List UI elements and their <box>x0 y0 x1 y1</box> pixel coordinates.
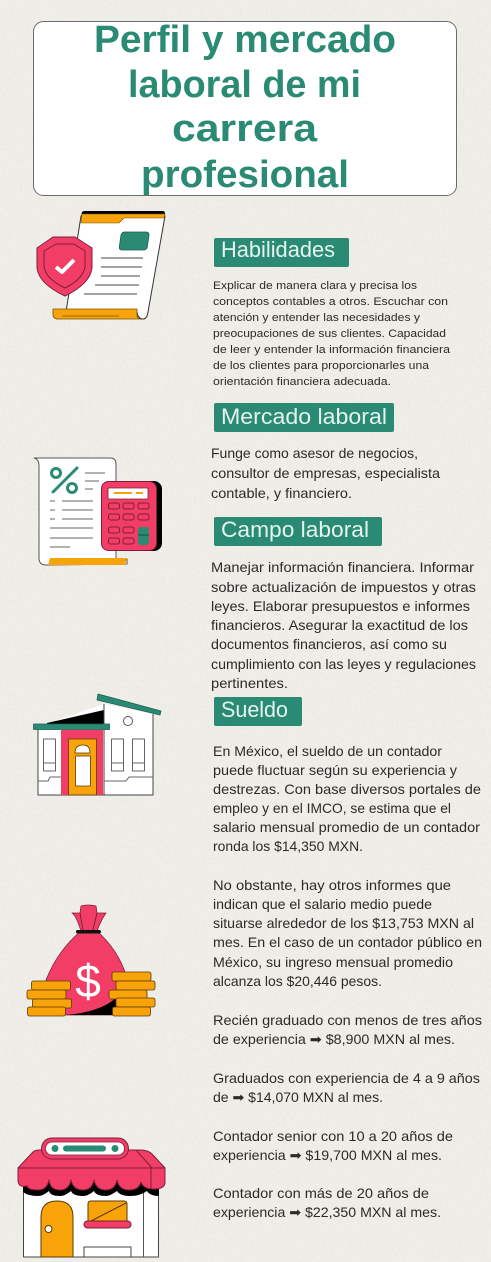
text: contador más de 20 años: Contador con más de 20 años de <box>213 1186 429 1201</box>
text: contador senior: experiencia ➡ $19,700 MXN al mes. <box>213 1148 442 1163</box>
text: contador senior: Contador senior con 10 a 20 años de <box>213 1129 453 1144</box>
title: Perfil y mercado <box>94 19 396 61</box>
heading: Habilidades: Habilidades <box>221 237 335 262</box>
text: contador senior <box>213 1129 453 1163</box>
icon: money bag and coins <box>27 905 155 1016</box>
title: profesional <box>141 154 349 196</box>
icon: money bag and coins: $ <box>75 955 101 1007</box>
text: mercado laboral: consultor de empresas, especialista <box>211 466 440 481</box>
text: recién graduado: Recién graduado con menos de tres años <box>213 1013 482 1028</box>
text: sueldo en México: destrezas. Con base diversos portales de <box>213 782 481 797</box>
text: habilidades: conceptos contables a otros. Escuchar con <box>213 296 448 308</box>
text: mercado laboral: contable, y financiero. <box>211 486 352 501</box>
text: habilidades: atención y entender las necesidades y <box>213 312 421 324</box>
text: recién graduado: de experiencia ➡ $8,900 MXN al mes. <box>213 1032 455 1047</box>
text: campo laboral <box>211 560 476 691</box>
text: campo laboral: sobre actualización de impuestos y otras <box>211 580 476 595</box>
heading: Sueldo <box>214 697 302 726</box>
text: contador más de 20 años <box>213 1186 441 1220</box>
text: campo laboral: Manejar información financiera. Informar <box>211 560 474 575</box>
text: otros informes: México, su ingreso mensual promedio <box>213 955 453 970</box>
text: otros informes: situarse alrededor de los $13,753 MXN al <box>213 916 474 931</box>
title: carrera <box>172 108 318 150</box>
text: sueldo en México: salario mensual promedio de un contador <box>213 820 481 835</box>
title: laboral de mi <box>128 64 361 106</box>
text: habilidades: de leer y entender la información financiera <box>213 344 450 356</box>
text: habilidades: preocupaciones de sus clientes. Capacidad <box>213 328 446 340</box>
text: habilidades: orientación financiera adecuada. <box>213 376 391 388</box>
text: campo laboral: cumplimiento con las leyes y regulaciones <box>211 657 476 672</box>
text: habilidades: de los clientes para proporcionarles una <box>213 360 429 372</box>
text: sueldo en México: ronda los $14,350 MXN. <box>213 839 363 854</box>
icon: document with shield <box>37 211 165 319</box>
text: graduados 4 a 9 años: Graduados con experiencia de 4 a 9 años <box>213 1071 480 1086</box>
heading: Campo laboral: Campo laboral <box>221 517 369 542</box>
title <box>34 19 456 196</box>
text: otros informes: indican que el salario medio puede <box>213 897 432 912</box>
icon: shop <box>18 1138 165 1257</box>
text: campo laboral: documentos financieros, así como su <box>211 637 447 652</box>
text: campo laboral: leyes. Elaborar presupuestos e informes <box>211 599 470 614</box>
text: otros informes: No obstante, hay otros informes que <box>213 878 451 893</box>
text: contador más de 20 años: experiencia ➡ $22,350 MXN al mes. <box>213 1205 441 1220</box>
text: graduados 4 a 9 años: de ➡ $14,070 MXN al mes. <box>213 1090 383 1105</box>
text: mercado laboral: Funge como asesor de negocios, <box>211 446 418 461</box>
text: habilidades <box>213 280 450 388</box>
heading: Sueldo: Sueldo <box>221 697 288 722</box>
text: campo laboral: financieros. Asegurar la exactitud de los <box>211 618 468 633</box>
text: mercado laboral <box>211 446 440 501</box>
text: otros informes: mes. En el caso de un contador público en <box>213 935 482 950</box>
heading: Mercado laboral: Mercado laboral <box>221 404 387 429</box>
text: otros informes <box>213 878 482 989</box>
text: sueldo en México: puede fluctuar según su experiencia y <box>213 763 457 778</box>
icon: receipt and calculator <box>34 458 162 565</box>
text: sueldo en México: En México, el sueldo de un contador <box>213 744 442 759</box>
text: otros informes: alcanza los $20,446 pesos. <box>213 974 382 989</box>
text: campo laboral: pertinentes. <box>211 676 288 691</box>
text: graduados 4 a 9 años <box>213 1071 480 1105</box>
text: recién graduado <box>213 1013 482 1047</box>
icon: house <box>34 694 161 795</box>
text: sueldo en México: empleo y en el IMCO, se estima que el <box>213 801 451 816</box>
text: habilidades: Explicar de manera clara y precisa los <box>213 280 418 292</box>
text: sueldo en México <box>213 744 481 854</box>
